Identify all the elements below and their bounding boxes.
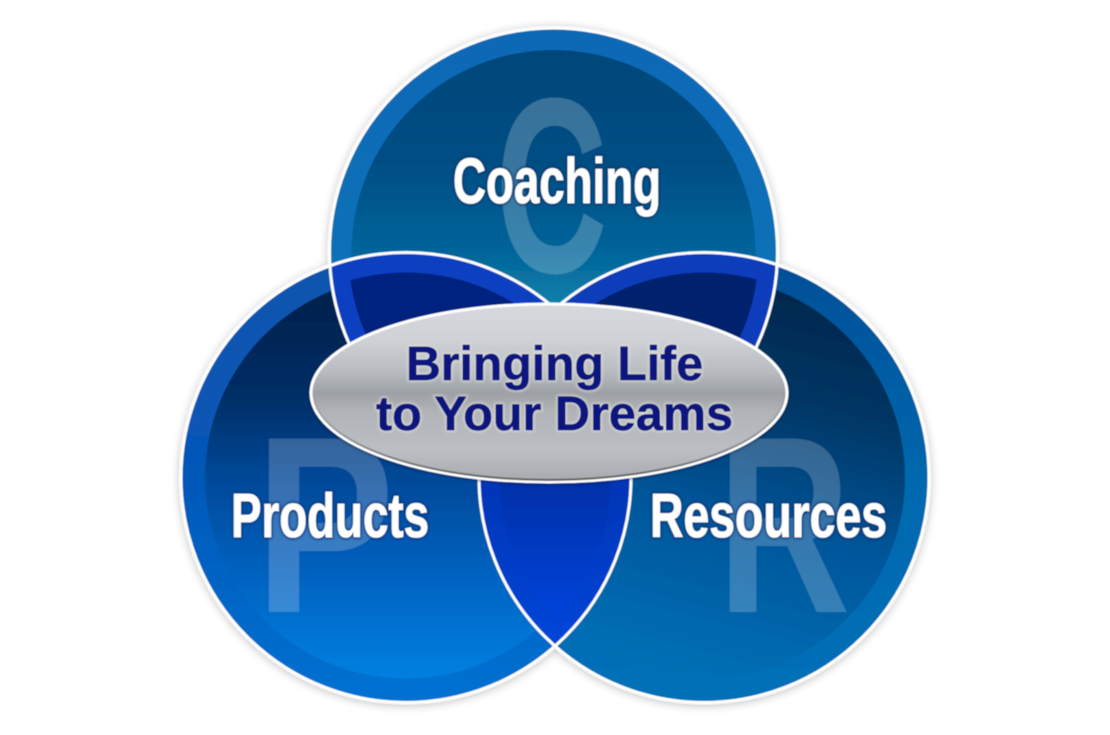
- panel: Resources circle: [479, 252, 929, 702]
- label: Products: Products: [231, 482, 429, 551]
- label: Coaching: Coaching: [453, 145, 661, 217]
- label: Products: Products: [231, 482, 429, 551]
- overlap: Products and Resources: [480, 478, 630, 644]
- label: Resources: Resources: [650, 482, 887, 551]
- overlap: Coaching and Resources: [566, 254, 776, 347]
- watermark letter P: P: [255, 385, 395, 666]
- watermark letter R: R: [718, 384, 850, 666]
- circle outlines: [181, 28, 929, 702]
- label: Resources: Resources: [650, 482, 887, 551]
- venn diagram: [174, 22, 936, 710]
- oval text: [376, 338, 733, 441]
- center oval: [309, 304, 789, 485]
- panel: Products circle: [181, 252, 631, 702]
- label: Coaching: Coaching: [453, 145, 661, 217]
- watermark letter C: C: [496, 47, 607, 326]
- panel: Coaching circle: [330, 28, 778, 476]
- overlap: Coaching and Products: [332, 254, 544, 342]
- oval text: Bringing Life: [406, 338, 703, 391]
- drop shadow: [180, 28, 930, 705]
- oval text: to Your Dreams: [376, 388, 733, 441]
- oval text: to Your Dreams: [376, 388, 733, 441]
- oval text: Bringing Life: [406, 338, 703, 391]
